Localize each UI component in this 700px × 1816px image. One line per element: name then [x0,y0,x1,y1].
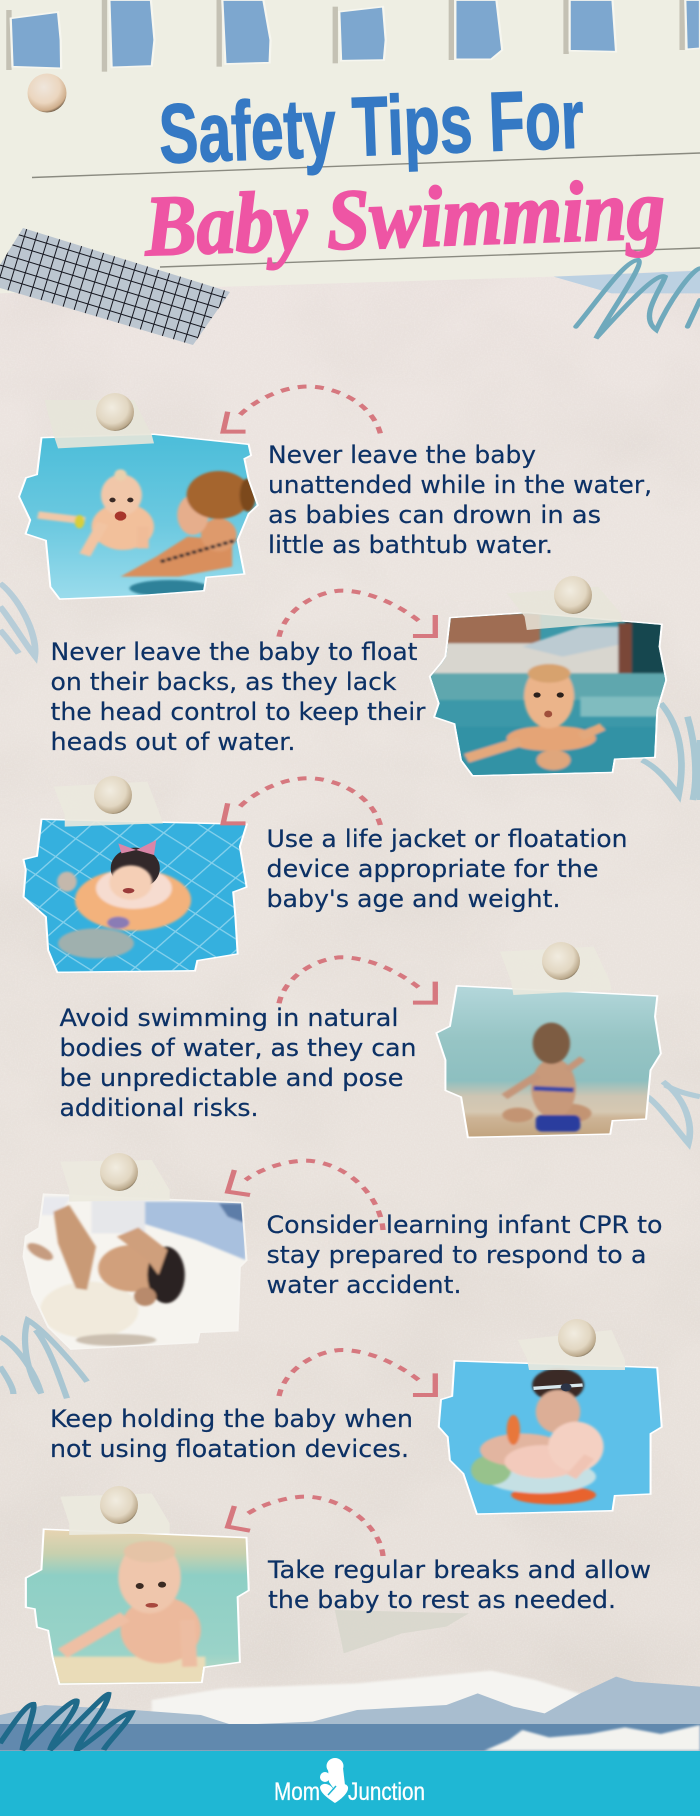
tape [54,782,163,827]
arrow: to photo [279,1350,435,1396]
torn tape scrap behind text [335,1610,469,1653]
tip text: water accident. [266,1271,462,1299]
panel: tip 4 [60,942,665,1140]
arrow: to photo [279,591,435,637]
washi tape: grid [0,228,230,345]
tip text: be unpredictable and pose [60,1064,404,1092]
tip text: not using floatation devices. [50,1435,409,1463]
tape [500,947,612,995]
pin [558,1319,596,1357]
scribble: left upper [0,583,35,656]
tape [60,1493,170,1535]
title [143,71,666,274]
tip text: as babies can drown in as [268,501,601,529]
photo: toddler on the beach [433,983,665,1140]
pin [100,1486,138,1524]
photo: baby in indoor pool [429,612,670,778]
pin [100,1153,138,1191]
tape [60,1160,170,1202]
photo: baby with neck float [18,817,254,977]
tip text: the baby to rest as needed. [268,1586,616,1614]
tip text: Take regular breaks and allow [267,1556,651,1584]
panel: tip 3 [18,776,628,977]
tip text: additional risks. [60,1094,258,1122]
bottom torn paper band [0,1671,700,1751]
arrow: to photo [228,1161,383,1230]
tip text [266,825,628,913]
pin [94,776,132,814]
ruled lines on header paper [32,153,700,267]
photo: mother holding baby in water [438,1360,665,1517]
pin [96,393,134,431]
tip text: Avoid swimming in natural [60,1004,398,1032]
tip text [50,1405,413,1463]
tip text [268,441,652,559]
tip text [266,1211,662,1299]
torn header paper [0,0,700,293]
panel: tip 2 [50,576,670,778]
pin [554,576,592,614]
tip text: Never leave the baby to float [50,638,418,666]
tip text: heads out of water. [50,728,296,756]
arrow: to photo [223,778,380,825]
tip text: on their backs, as they lack [50,668,397,696]
panel: tip 5 [22,1153,663,1350]
tip text [50,638,426,756]
logo: MomJunction [274,1758,425,1806]
tip text: bodies of water, as they can [60,1034,416,1062]
arrow: to photo [279,957,435,1003]
tip text: unattended while in the water, [268,471,652,499]
tip text: stay prepared to respond to a [266,1241,646,1269]
pin [542,942,580,980]
logo: MomJunction: Junction [348,1778,425,1806]
logo wordmark: Mom [274,1778,320,1806]
tape [507,587,623,630]
photo: infant CPR [22,1193,250,1350]
arrow: to photo [228,1497,383,1556]
tip text: Consider learning infant CPR to [266,1211,662,1239]
panel: tip 1 [18,387,652,600]
tape [518,1330,625,1370]
tip text [60,1004,416,1122]
panel: tip 6 [50,1319,665,1517]
footer bar [0,1751,700,1816]
photo: baby at pool edge [22,1528,254,1685]
tip text: Use a life jacket or floatation [266,825,628,853]
tape [45,400,154,448]
photo: mother and baby in pool [18,433,259,600]
scribble: left lower [0,1320,87,1398]
tip text: device appropriate for the [266,855,598,883]
tip text: little as bathtub water. [268,531,553,559]
tip text [267,1556,651,1614]
tip text: Never leave the baby [268,441,536,469]
panel: tip 7 [22,1486,651,1685]
arrow: to photo [223,387,380,433]
logo icon: mother and heart [320,1758,348,1803]
scribble: bottom left dark [0,1694,132,1750]
tip text: the head control to keep their [50,698,426,726]
torn blue tabs [6,0,700,72]
scribble: top right [554,260,700,338]
scribble: right middle [647,1082,700,1143]
tip text: baby's age and weight. [266,885,560,913]
tip text: Keep holding the baby when [50,1405,413,1433]
pin: header [28,74,66,112]
scribble: right upper [642,703,700,800]
